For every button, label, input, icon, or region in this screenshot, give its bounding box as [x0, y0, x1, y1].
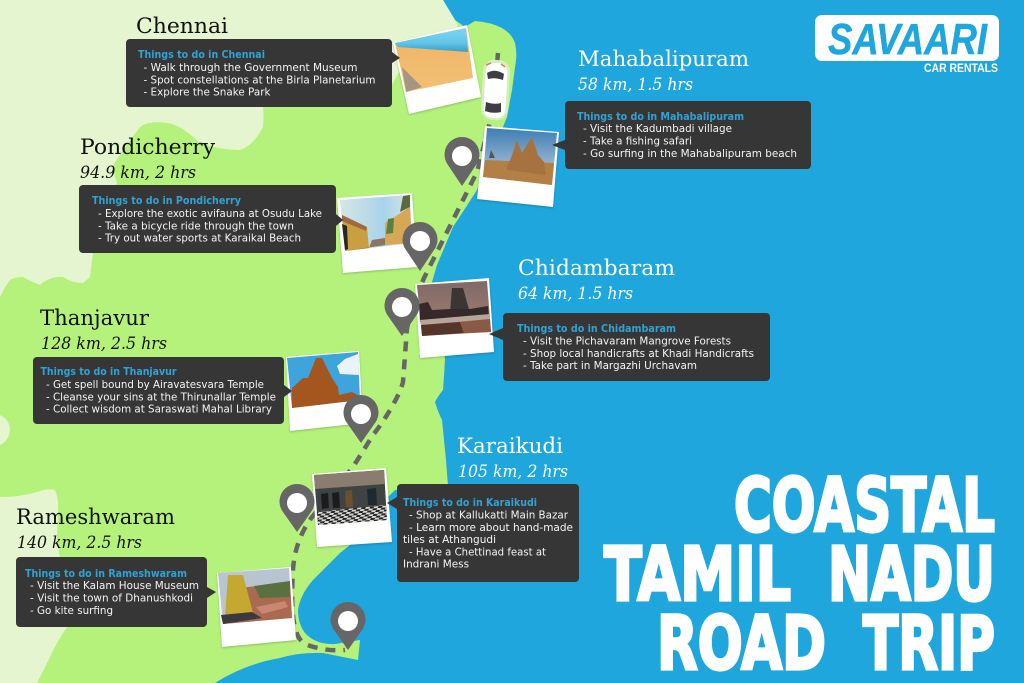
callout: Pondicherry things to do: - Explore the exotic avifauna at Osudu Lake: [98, 207, 322, 220]
callout: Karaikudi things to do: Things to do in Karaikudi: [403, 496, 537, 509]
callout: Rameshwaram things to do: - Visit the Kalam House Museum: [30, 579, 199, 592]
distance: Thanjavur: 128 km, 2.5 hrs: [41, 334, 167, 353]
callout: Mahabalipuram things to do: Things to do in Mahabalipuram: [577, 110, 744, 123]
callout: Rameshwaram things to do: - Go kite surfing: [30, 604, 113, 617]
callout: Karaikudi things to do: [387, 484, 579, 582]
heading: Mahabalipuram: Mahabalipuram: [578, 47, 749, 71]
callout: Rameshwaram things to do: [16, 557, 216, 627]
callout: Karaikudi things to do: - Learn more about hand-made: [409, 521, 573, 534]
distance: Rameshwaram: 140 km, 2.5 hrs: [17, 533, 142, 552]
light inland area west bump: [0, 415, 10, 445]
map pin 4: [343, 395, 378, 443]
photo: Pondicherry street: [337, 193, 417, 273]
callout: Chidambaram things to do: - Take part in Margazhi Urchavam: [523, 359, 697, 372]
panel: Chennai: [126, 14, 400, 107]
callout: Chennai things to do: - Walk through the Government Museum: [144, 61, 358, 74]
callout: Pondicherry things to do: - Take a bicycle ride through the town: [98, 220, 294, 232]
callout: Chennai things to do: Things to do in Chennai: [138, 48, 265, 61]
panel: Chidambaram: [489, 256, 770, 381]
callout: Mahabalipuram things to do: - Go surfing in the Mahabalipuram beach: [583, 147, 797, 160]
photo: Karaikudi mansion: [312, 468, 392, 547]
distance: Pondicherry: 94.9 km, 2 hrs: [80, 163, 196, 182]
panel: Thanjavur: [33, 306, 292, 424]
callout: Chidambaram things to do: [489, 313, 770, 381]
map pin 3: [384, 288, 420, 336]
car icon: [480, 59, 511, 121]
title: TAMIL: [604, 532, 791, 618]
photo: Thanjavur temple: [286, 351, 363, 431]
callout: Rameshwaram things to do: Things to do in Rameshwaram: [25, 567, 187, 580]
photo: Mahabalipuram temple: [477, 126, 559, 207]
logo: Savaari Car Rentals: SAVAARI: [828, 15, 988, 64]
callout: Rameshwaram things to do: - Visit the town of Dhanushkodi: [30, 592, 193, 604]
callout: Chidambaram things to do: - Shop local handicrafts at Khadi Handicrafts: [523, 347, 754, 360]
panel: Pondicherry: [79, 135, 343, 253]
photo: Chennai beach: [393, 25, 481, 114]
title: [604, 463, 995, 683]
mainland map: [0, 0, 516, 683]
light inland area south: [0, 489, 67, 683]
logo: Savaari Car Rentals: CAR RENTALS: [924, 63, 998, 75]
callout: Thanjavur things to do: Things to do in Thanjavur: [40, 365, 177, 378]
callout: Chidambaram things to do: - Visit the Pichavaram Mangrove Forests: [523, 334, 731, 348]
distance: Mahabalipuram: 58 km, 1.5 hrs: [578, 75, 693, 94]
distance: Chidambaram: 64 km, 1.5 hrs: [518, 284, 633, 303]
callout: Pondicherry things to do: - Try out water sports at Karaikal Beach: [98, 232, 301, 244]
map pin 1: [445, 137, 480, 186]
map pin 2: [402, 222, 438, 271]
photo: Chidambaram temple: [415, 278, 494, 358]
callout: Karaikudi things to do: - Shop at Kallukatti Main Bazar: [409, 508, 568, 522]
callout: Pondicherry things to do: [79, 185, 343, 253]
panel: Karaikudi: [387, 434, 579, 582]
callout: Chidambaram things to do: Things to do in Chidambaram: [517, 322, 676, 335]
distance: Karaikudi: 105 km, 2 hrs: [458, 462, 568, 481]
logo: Savaari Car Rentals: [815, 15, 999, 75]
callout: Thanjavur things to do: [33, 357, 292, 424]
callout: Karaikudi things to do: Indrani Mess: [403, 558, 469, 570]
callout: Mahabalipuram things to do: - Visit the Kadumbadi village: [583, 122, 732, 135]
callout: Thanjavur things to do: - Cleanse your sins at the Thirunallar Temple: [46, 390, 276, 404]
heading: Rameshwaram: Rameshwaram: [16, 505, 175, 529]
light inland area north: [0, 0, 458, 297]
heading: Pondicherry: Pondicherry: [80, 135, 215, 159]
callout: Chennai things to do: - Spot constellations at the Birla Planetarium: [144, 74, 376, 86]
map pin 5: [280, 484, 314, 532]
map pin 6: [331, 602, 366, 650]
callout: Mahabalipuram things to do: [552, 101, 811, 169]
heading: Thanjavur: Thanjavur: [40, 306, 150, 330]
panel: Rameshwaram: [16, 505, 216, 627]
photo: Rameshwaram temple: [217, 567, 296, 647]
panel: Mahabalipuram: [552, 47, 811, 169]
callout: Thanjavur things to do: - Collect wisdom at Saraswati Mahal Library: [46, 402, 272, 416]
dashed road route: [292, 53, 498, 650]
callout: Thanjavur things to do: - Get spell bound by Airavatesvara Temple: [46, 378, 264, 391]
callout: Pondicherry things to do: Things to do in Pondicherry: [92, 194, 241, 207]
callout: Karaikudi things to do: tiles at Athangudi: [403, 533, 496, 546]
heading: Chennai: Chennai: [136, 14, 228, 38]
callout: Karaikudi things to do: - Have a Chettinad feast at: [409, 546, 547, 558]
callout: Chennai things to do: [126, 39, 400, 107]
heading: Karaikudi: Karaikudi: [457, 434, 563, 458]
callout: Mahabalipuram things to do: - Take a fishing safari: [583, 134, 692, 148]
callout: Chennai things to do: - Explore the Snake Park: [144, 86, 271, 98]
heading: Chidambaram: Chidambaram: [518, 256, 675, 280]
